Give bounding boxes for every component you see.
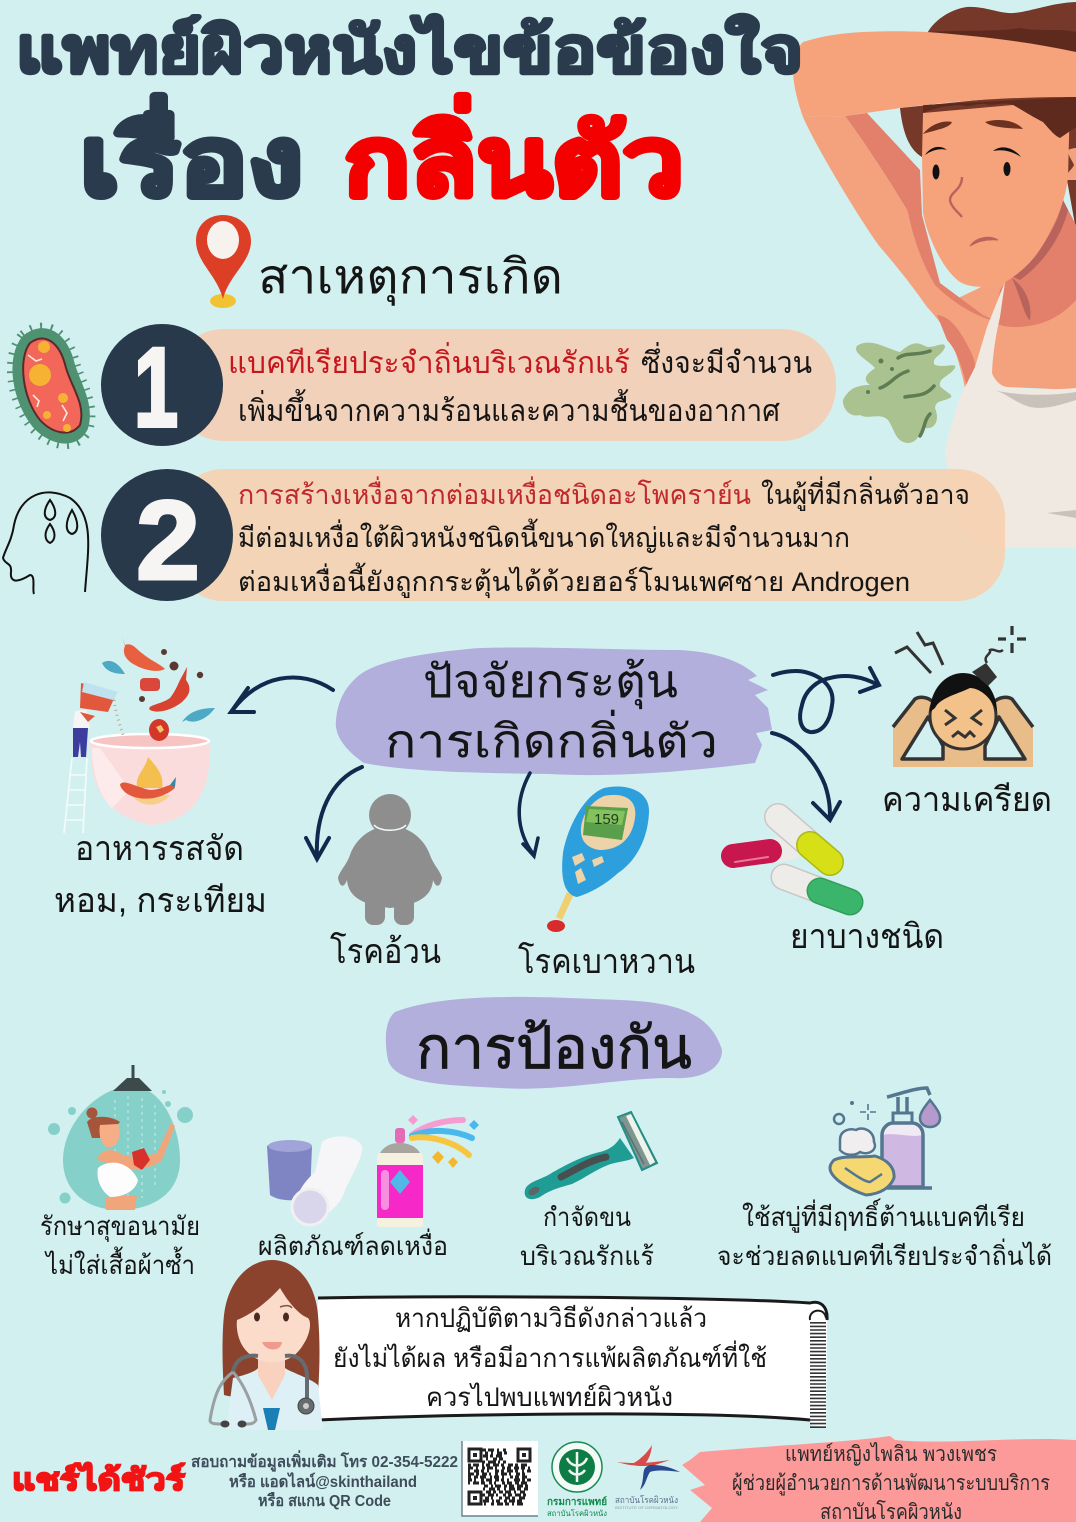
- cause 1 text: เพิ่มขึ้นจากความร้อนและความชื้นของอากาศ: [238, 389, 780, 428]
- cause 2 text: ในผู้ที่มีกลิ่นตัวอาจ: [761, 476, 970, 511]
- footer: contact information: หรือ สแกน QR Code: [258, 1492, 391, 1510]
- icon: spicy food bowl: [64, 637, 215, 833]
- title line two: เรื่อง: [80, 94, 303, 216]
- footer: contact information: สอบถามข้อมูลเพิ่มเติม โทร 02-354-5222: [191, 1450, 458, 1473]
- cause 2 text: [238, 476, 970, 599]
- label: stress: ความเครียด: [882, 781, 1052, 819]
- icon: bacteria: [15, 331, 87, 441]
- heading: prevention: [386, 997, 722, 1089]
- panel: trigger factors heading: ปัจจัยกระตุ้น: [423, 655, 678, 710]
- icon: location pin: [196, 215, 251, 308]
- logo: Department of Medical Services: สถาบันโรคผิวหนัง: [547, 1508, 607, 1518]
- arrow: to obesity: [306, 767, 362, 859]
- cause 1 text: [228, 342, 812, 428]
- label: spicy food: หอม, กระเทียม: [54, 882, 267, 920]
- number badge 2: [101, 469, 233, 603]
- footer: author panel: แพทย์หญิงไพลิน พวงเพชร: [785, 1442, 997, 1466]
- icon: stressed head with bomb: [893, 626, 1033, 767]
- icon: razor: [525, 1112, 657, 1199]
- title line one: แพทย์ผิวหนังไขข้อข้องใจ: [16, 14, 803, 86]
- panel: cause 1: [101, 324, 836, 450]
- number badge 2: 2: [136, 478, 200, 603]
- arrow: to medicine: [772, 733, 840, 820]
- cause 2 text: มีต่อมเหงื่อใต้ผิวหนังชนิดนี้ขนาดใหญ่และมีจำนวนมาก: [238, 518, 850, 553]
- icon: medicine capsules: [733, 817, 850, 902]
- logo: Institute of Dermatology: สถาบันโรคผิวหนัง: [615, 1495, 678, 1505]
- label: obesity: โรคอ้วน: [330, 932, 441, 971]
- heading: prevention: การป้องกัน: [416, 1016, 692, 1081]
- callout: scroll advice: ควรไปพบแพทย์ผิวหนัง: [426, 1382, 673, 1412]
- panel: trigger factors heading: [336, 647, 772, 775]
- panel: trigger factors heading: การเกิดกลิ่นตัว: [385, 709, 718, 767]
- panel: cause 2: [101, 469, 1005, 603]
- icon: woman showering: [48, 1065, 193, 1210]
- label: antibacterial soap: จะช่วยลดแบคทีเรียประจำถิ่นได้: [717, 1238, 1052, 1271]
- footer: contact information: หรือ แอดไลน์@skinthailand: [229, 1472, 417, 1491]
- title line two: [80, 94, 684, 216]
- label: hair removal: บริเวณรักแร้: [520, 1241, 654, 1271]
- callout: scroll advice: ยังไม่ได้ผล หรือมีอาการแพ้ผลิตภัณฑ์ที่ใช้: [333, 1340, 767, 1373]
- callout: scroll advice: [318, 1297, 827, 1428]
- illustration: female doctor: [210, 1260, 323, 1430]
- icon: glucose meter: [547, 786, 649, 932]
- label: antibacterial soap: ใช้สบู่ที่มีฤทธิ์ต้านแบคทีเรีย: [742, 1198, 1025, 1233]
- heading: causes: สาเหตุการเกิด: [258, 251, 563, 306]
- label: diabetes: โรคเบาหวาน: [518, 942, 695, 981]
- label: hygiene: ไม่ใส่เสื้อผ้าซ้ำ: [44, 1246, 195, 1280]
- footer: contact information: [191, 1450, 458, 1510]
- footer: share slogan: แชร์ได้ชัวร์: [12, 1462, 185, 1497]
- icon: green odor cloud: [843, 343, 955, 443]
- icon: obese figure: [338, 794, 442, 925]
- logo: Department of Medical Services: [547, 1442, 607, 1518]
- icon: roll-on and spray deodorant: [267, 1115, 479, 1227]
- callout: scroll advice: หากปฏิบัติตามวิธีดังกล่าวแล้ว: [395, 1303, 707, 1333]
- label: spicy food: [54, 830, 267, 920]
- logo: Department of Medical Services: กรมการแพทย์: [547, 1496, 607, 1508]
- icon: glucose meter: 159: [594, 811, 619, 828]
- icon: head with sweat drops: [3, 492, 88, 594]
- label: spicy food: อาหารรสจัด: [75, 830, 244, 868]
- arrow: to diabetes: [519, 773, 538, 856]
- footer: author panel: [682, 1436, 1076, 1522]
- number badge 1: 1: [134, 325, 178, 450]
- logo: Institute of Dermatology: INSTITUTE OF DERMATOLOGY: [615, 1505, 678, 1510]
- number badge 1: [101, 324, 223, 450]
- label: deodorant products: ผลิตภัณฑ์ลดเหงื่อ: [258, 1228, 448, 1261]
- label: hygiene: รักษาสุขอนามัย: [40, 1211, 200, 1242]
- cause 1 text: แบคทีเรียประจำถิ่นบริเวณรักแร้: [228, 342, 630, 380]
- icon: antibacterial soap and pump bottle: [830, 1088, 940, 1195]
- logo: Institute of Dermatology: [615, 1445, 680, 1510]
- cause 2 text: การสร้างเหงื่อจากต่อมเหงื่อชนิดอะโพคราย์น: [238, 476, 751, 510]
- label: hair removal: [520, 1202, 654, 1271]
- title line two: กลิ่นตัว: [344, 94, 684, 216]
- label: antibacterial soap: [717, 1198, 1052, 1271]
- cause 1 text: ซึ่งจะมีจำนวน: [641, 342, 812, 380]
- label: hygiene: [40, 1211, 200, 1280]
- label: medicine: ยาบางชนิด: [790, 918, 944, 956]
- illustration: worried woman raising arm: [793, 2, 1076, 548]
- cause 2 text: ต่อมเหงื่อนี้ยังถูกกระตุ้นได้ด้วยฮอร์โมนเพศชาย Androgen: [238, 562, 910, 599]
- label: hair removal: กำจัดขน: [543, 1202, 631, 1232]
- arrow: looped to stress: [773, 668, 879, 732]
- QR code: [462, 1441, 538, 1516]
- arrow: to spicy food: [231, 677, 333, 712]
